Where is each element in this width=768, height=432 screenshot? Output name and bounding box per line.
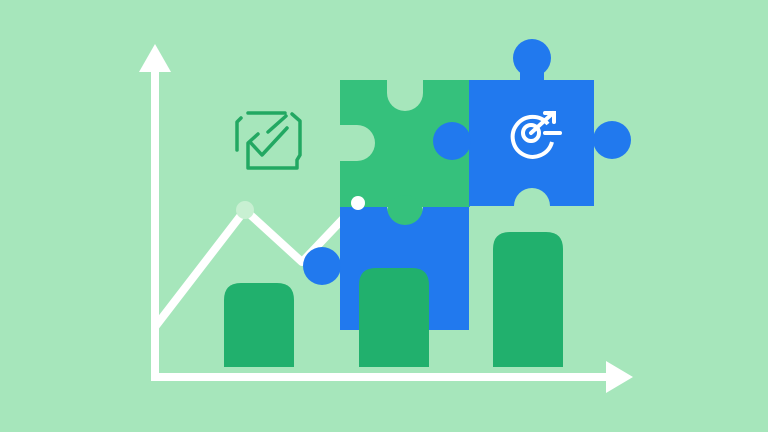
line graph end dot: [351, 196, 365, 210]
puzzle piece: green top-left: [339, 75, 470, 231]
line graph: [155, 201, 358, 327]
bars: [224, 232, 563, 367]
icon: target: [513, 113, 560, 157]
icon: checklist: [237, 113, 300, 168]
puzzle piece: blue top-right with target icon: [433, 39, 631, 206]
axes with arrows: [139, 44, 633, 393]
puzzle piece: blue bottom-left: [303, 207, 469, 330]
